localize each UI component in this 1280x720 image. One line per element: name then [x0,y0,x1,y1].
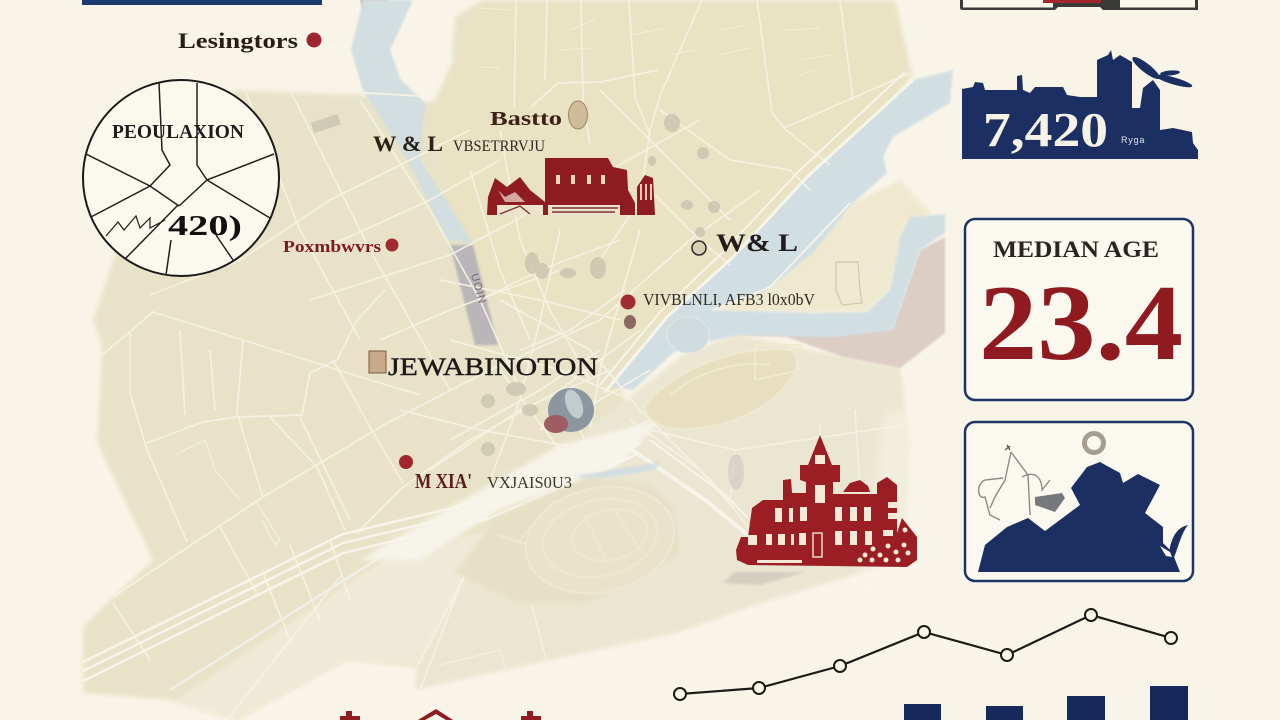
label: Lexington [178,28,322,53]
population value: 420) [168,211,242,242]
panel: median age [965,219,1193,400]
illustration: red building upper [487,158,655,215]
population label: PEOULAXION [112,121,245,143]
stat value: 7,420 [983,102,1108,157]
map: wide road bundle [83,72,913,690]
median age value: 23.4 [979,264,1183,383]
outline landmark [979,445,1050,520]
label: W&L upper: W & L [373,131,443,156]
panel: total stat skyline: Ryga [1121,135,1145,145]
map: street grid [100,0,910,720]
map: city base [83,0,953,720]
label: W&L upper [373,131,545,156]
map: grey boulevard label: UOIN [468,272,488,306]
median age label: MEDIAN AGE [993,237,1159,262]
label: W&L right [692,230,798,257]
label: lower pin [399,455,572,493]
map: small river strip [575,462,660,480]
map: field south of river [645,345,800,429]
map: central blocks [311,114,744,490]
map: building shadow [723,572,805,585]
line chart [674,609,1177,700]
map: outline landmark [836,262,862,305]
map: central stadium pin [544,387,594,433]
panel: state map [965,422,1193,581]
population circle [83,80,279,276]
top right strip [960,0,1198,10]
label: Bastto: Bastto [490,108,562,130]
label: red pin left: Poxmbwvrs [283,237,381,256]
ring marker [1084,434,1104,452]
bottom red icons [340,709,541,720]
map: stadium [455,474,684,606]
label: red pin centre [620,290,816,329]
map: haze at junction [360,420,660,560]
illustration: red hall lower [736,435,917,567]
label: Washington: JEWABINOTON [388,354,598,381]
map land [83,0,932,720]
label: W&L right: W& L [716,230,798,257]
top left navy bar [82,0,322,5]
navy terrain [978,462,1180,572]
label: Bastto [490,101,588,130]
panel: total stat skyline [962,50,1198,159]
label: lower pin: VXJAIS0U3 [487,473,572,492]
label: Lexington: Lesingtors [178,28,299,53]
bar chart [904,686,1188,720]
map: pale lower-left land [170,530,490,720]
label: red pin centre: VIVBLNLI, AFB3 l0x0bV [643,290,816,309]
label: Washington [369,351,598,381]
map: pale fade right [860,410,930,580]
label: lower pin: M XIA' [415,469,472,493]
label: W&L upper: VBSETRRVJU [453,138,545,155]
map: rivers [350,0,953,390]
